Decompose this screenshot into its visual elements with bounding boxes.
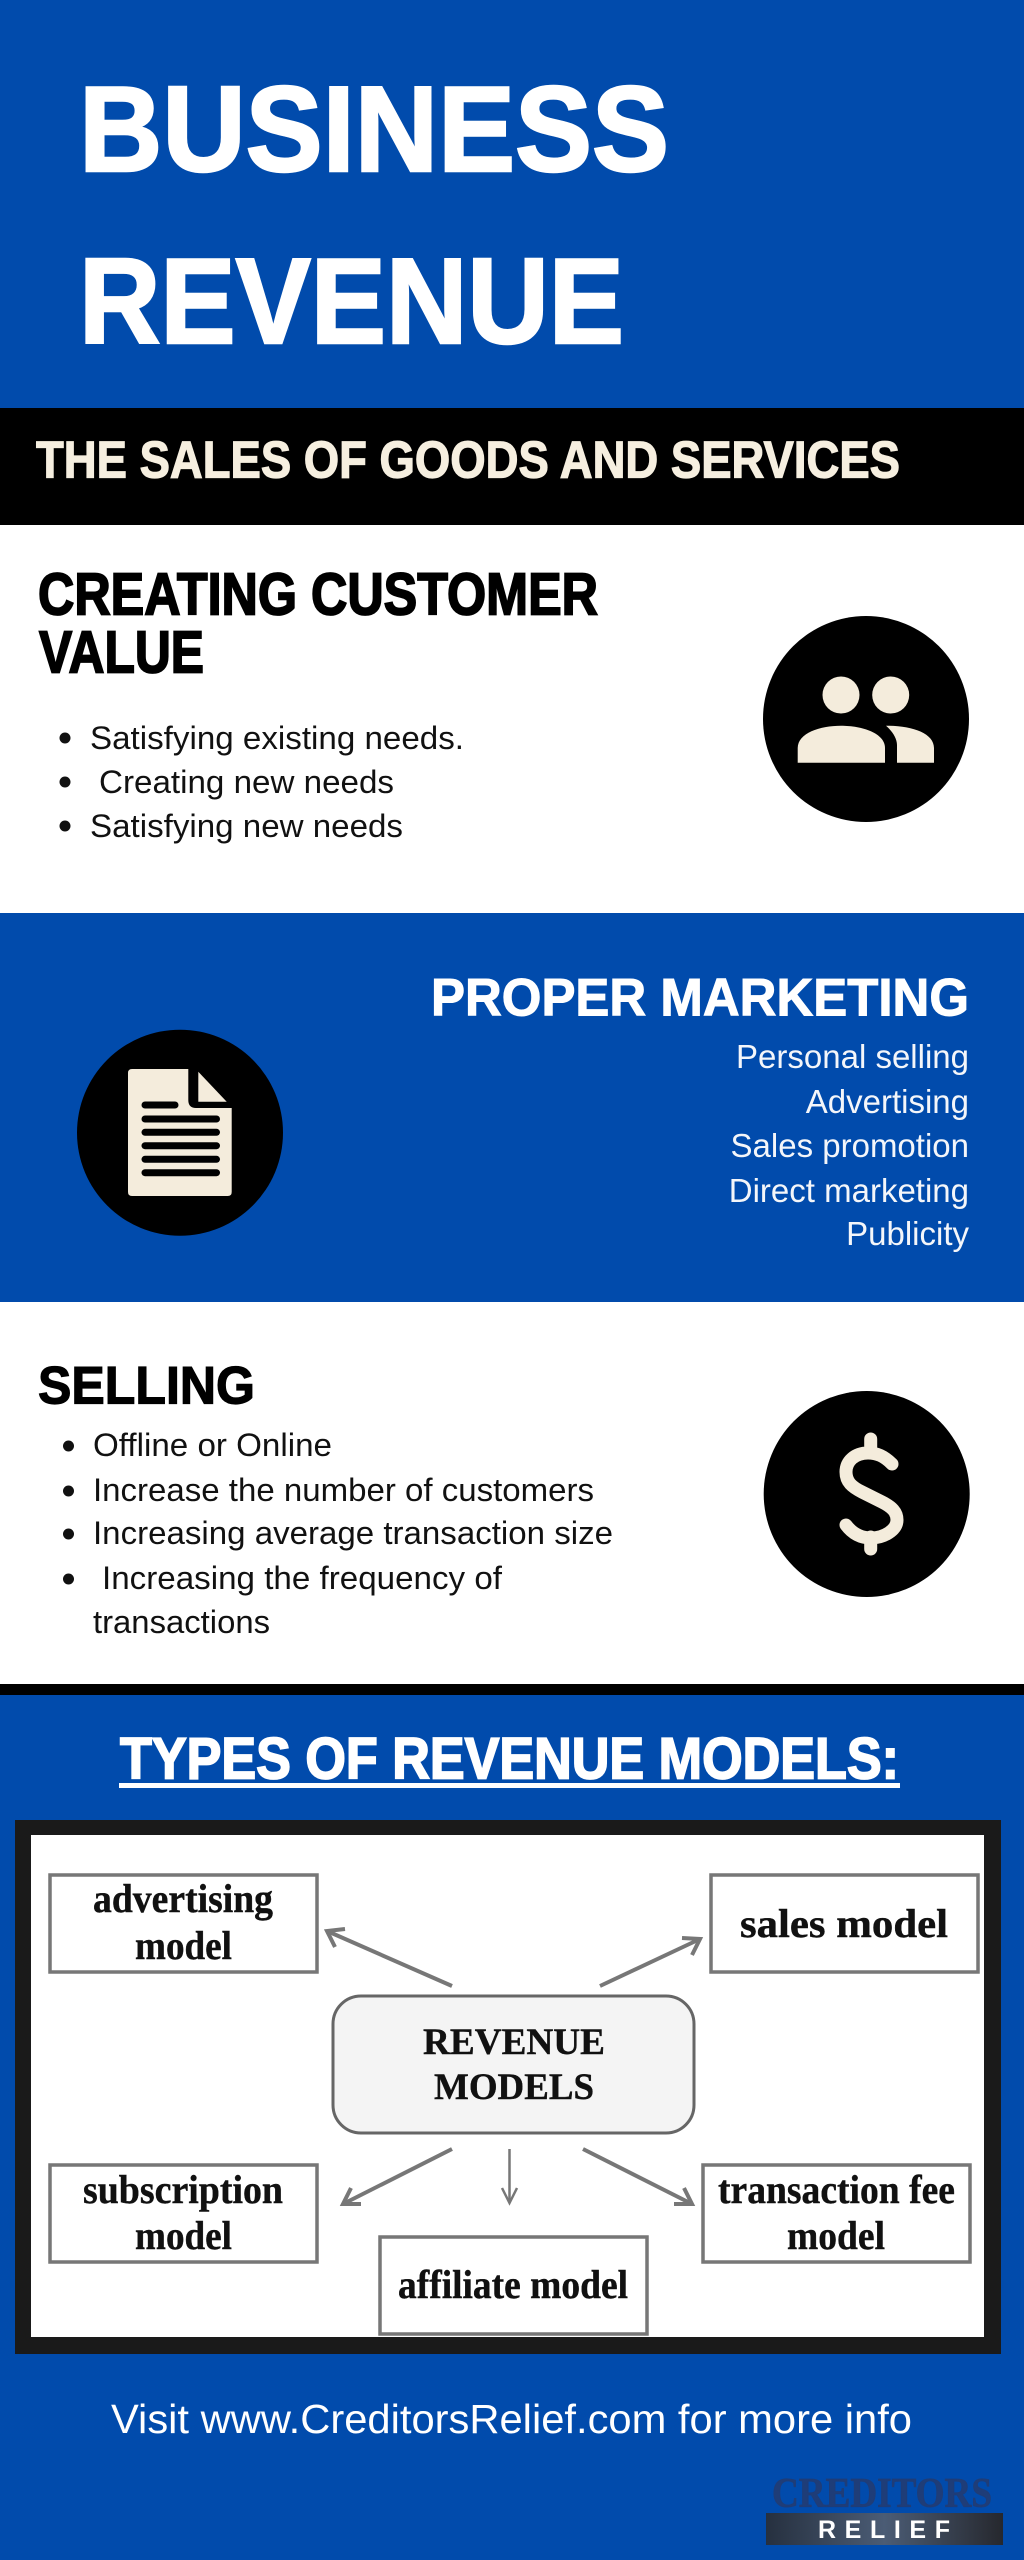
bullet list: selling	[63, 1427, 613, 1640]
bullet list: customer value: Satisfying existing needs.	[90, 720, 464, 756]
bullet list: selling: Offline or Online	[93, 1427, 332, 1463]
subtitle band	[0, 408, 1024, 525]
node: transaction fee model: model	[787, 2213, 885, 2258]
logo: creditors relief: RELIEF	[818, 2516, 950, 2544]
node: subscription model	[50, 2165, 317, 2262]
icon: people	[763, 616, 969, 822]
node: advertising model: advertising	[93, 1876, 273, 1921]
node: revenue models	[333, 1996, 694, 2133]
logo: creditors relief: CREDITORS	[772, 2471, 992, 2517]
node: transaction fee model	[703, 2165, 970, 2262]
title: BUSINESS	[79, 61, 669, 197]
list: marketing channels: Sales promotion	[731, 1127, 969, 1164]
bullet list: selling: transactions	[93, 1604, 270, 1640]
node: revenue models: REVENUE	[423, 2022, 605, 2063]
node: sales model: sales model	[740, 1901, 948, 1946]
bullet list: selling: Increase the number of customers	[93, 1472, 594, 1508]
bullet list: selling: Increasing average transaction size	[93, 1515, 613, 1551]
panel: selling	[0, 1302, 1024, 1684]
panel: creating customer value	[0, 525, 1024, 913]
heading: types of revenue models: TYPES OF REVENUE MODELS:	[120, 1726, 899, 1792]
logo: creditors relief	[766, 2471, 1003, 2545]
arrows	[327, 1929, 700, 2204]
title: REVENUE	[79, 233, 624, 369]
header panel	[0, 0, 1024, 408]
node: revenue models: MODELS	[434, 2067, 594, 2108]
node: transaction fee model: transaction fee	[718, 2167, 955, 2212]
heading: proper marketing: PROPER MARKETING	[431, 968, 969, 1028]
bullet list: customer value: Satisfying new needs	[90, 808, 403, 844]
panel: proper marketing	[0, 913, 1024, 1302]
subtitle band: THE SALES OF GOODS AND SERVICES	[36, 432, 900, 490]
title	[79, 61, 669, 369]
heading: creating customer value: CREATING CUSTOMER	[38, 562, 598, 628]
bullet list: customer value	[60, 720, 464, 844]
node: subscription model: model	[135, 2213, 232, 2258]
heading: creating customer value	[38, 562, 598, 686]
node: sales model	[711, 1875, 978, 1972]
bullet list: customer value: Creating new needs	[99, 764, 394, 800]
panel: types of revenue models	[0, 1695, 1024, 2560]
list: marketing channels: Advertising	[806, 1083, 969, 1120]
node: advertising model	[50, 1875, 317, 1972]
bullet list: selling: Increasing the frequency of	[102, 1560, 503, 1596]
icon: document	[77, 1030, 283, 1236]
node: advertising model: model	[135, 1923, 232, 1968]
list: marketing channels: Direct marketing	[729, 1172, 969, 1209]
node: affiliate model: affiliate model	[398, 2262, 628, 2307]
divider band	[0, 1684, 1024, 1695]
footer call to action: Visit www.CreditorsRelief.com for more info	[111, 2396, 912, 2442]
heading: selling: SELLING	[38, 1356, 255, 1416]
diagram frame	[15, 1820, 1001, 2354]
node: subscription model: subscription	[83, 2167, 283, 2212]
node: affiliate model	[380, 2237, 647, 2334]
list: marketing channels: Publicity	[846, 1215, 969, 1252]
list: marketing channels: Personal selling	[736, 1038, 969, 1075]
list: marketing channels	[729, 1038, 969, 1252]
icon: dollar	[764, 1391, 970, 1597]
heading: creating customer value: VALUE	[39, 620, 204, 686]
